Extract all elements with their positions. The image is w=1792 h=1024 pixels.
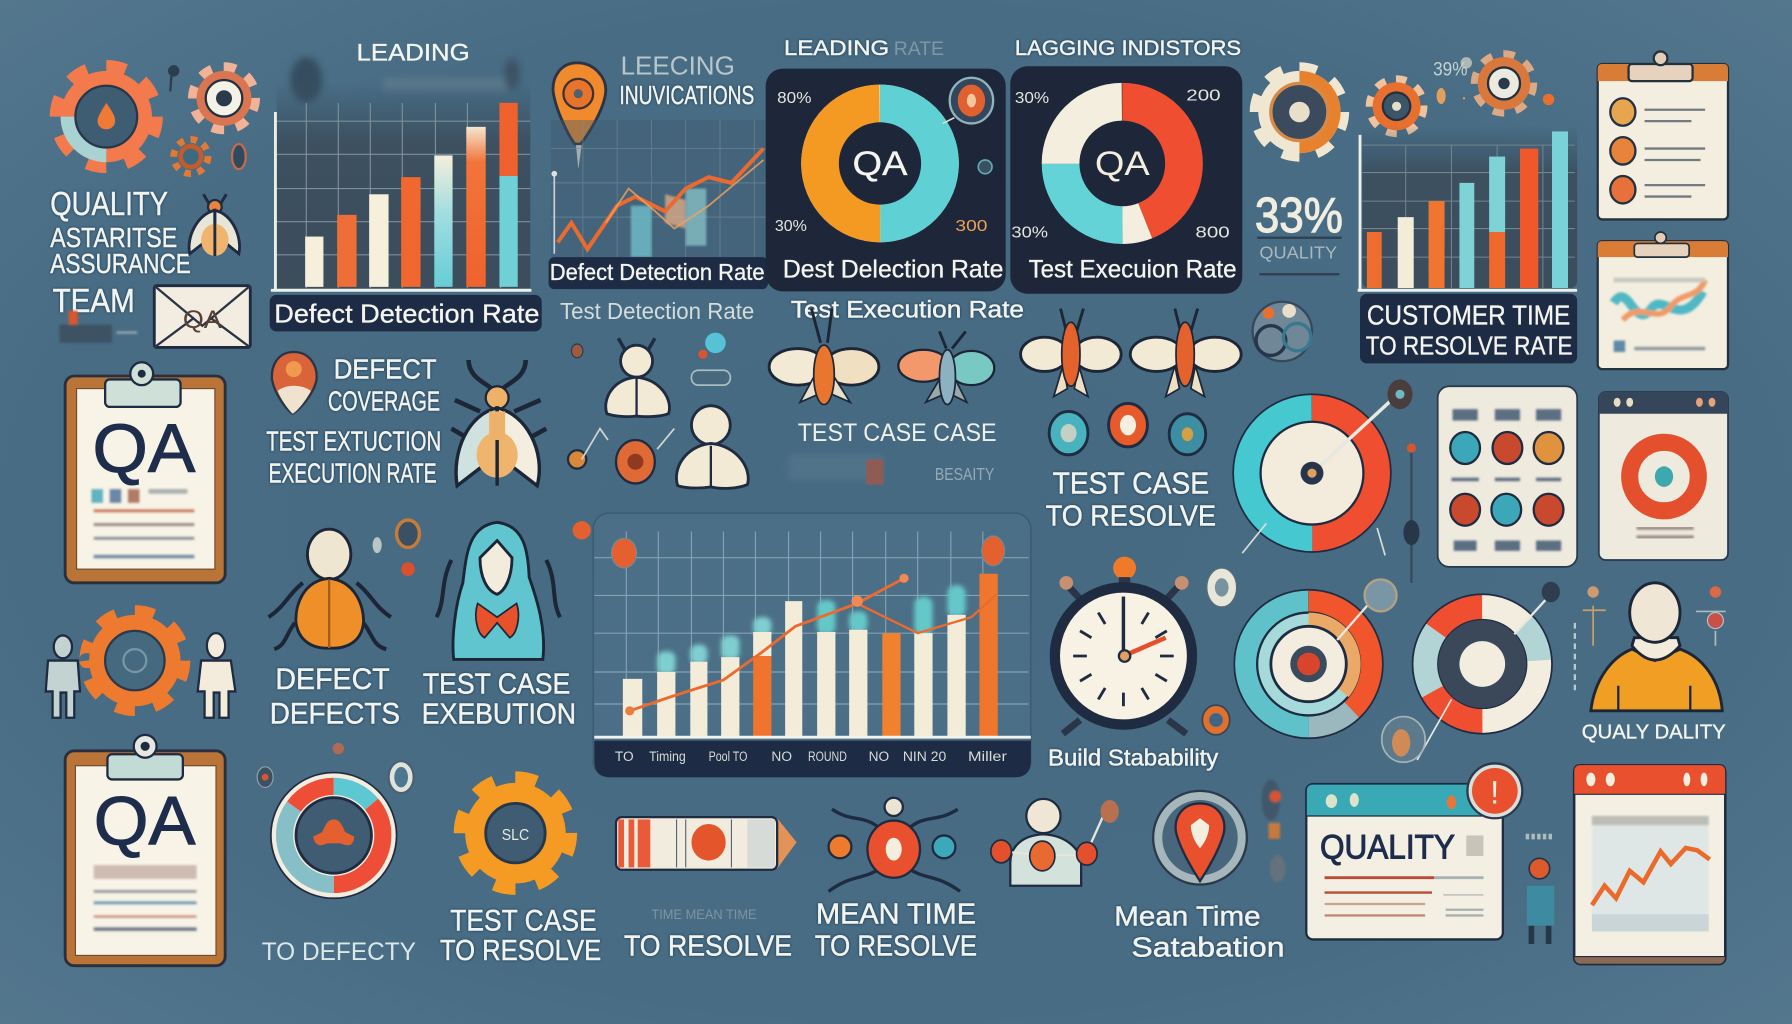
chart label: TO RESOLVE RATE <box>1366 330 1573 360</box>
chart footer <box>594 741 1031 777</box>
axis labels: NO <box>771 749 792 764</box>
heading: quality: QUALITY <box>1320 828 1455 866</box>
chart background <box>593 513 1031 777</box>
axis labels: Pool TO <box>709 749 747 764</box>
text: defect defects: DEFECTS <box>270 697 400 730</box>
panel background <box>1010 66 1242 294</box>
panel: lagging icons row <box>1253 55 1554 361</box>
chart label <box>1360 294 1577 363</box>
panel: target window <box>1599 392 1728 560</box>
axis labels: ROUND <box>808 749 847 764</box>
heading: leading rate: LEADING <box>784 35 889 60</box>
icon: tiny nodes <box>373 520 419 576</box>
text: test case execution: TEST CASE <box>423 669 570 701</box>
panel: stopwatch <box>1048 557 1237 771</box>
panel background <box>766 69 1006 291</box>
icon: orange gear <box>1370 80 1423 133</box>
QA mark: QA <box>93 410 196 487</box>
panel: main trend chart <box>593 513 1031 777</box>
ring chart <box>271 773 397 898</box>
panel: to defect ring <box>257 743 416 966</box>
stat: 33% quality <box>1255 189 1343 274</box>
gear label: SLC <box>502 827 529 844</box>
panel: fly icons <box>769 309 1241 405</box>
card clip <box>1634 232 1689 257</box>
caption: test execution rate: Test Execution Rate <box>791 297 1024 324</box>
heading: leeching inuvications <box>619 50 754 110</box>
text: mean time satabation: Satabation <box>1131 932 1285 963</box>
chart plot <box>551 120 768 257</box>
target one <box>1234 590 1383 738</box>
heading: quality assurance team: TEAM <box>53 283 135 320</box>
target two pointer <box>1382 582 1560 762</box>
axis labels: Miller <box>968 749 1007 764</box>
text: mean time to resolve: MEAN TIME <box>816 898 976 930</box>
icon: red marker <box>573 521 591 539</box>
stat: 33% quality: QUALITY <box>1259 242 1338 262</box>
target ring <box>1630 442 1698 511</box>
axis labels: NIN 20 <box>903 749 947 764</box>
chart plot area <box>1362 126 1577 288</box>
card body <box>1438 386 1577 567</box>
window dots <box>1586 773 1707 786</box>
icon: small label clutter <box>59 311 137 343</box>
icon: stopwatch <box>1055 557 1192 734</box>
icon: red fly left <box>1021 309 1121 397</box>
heading: quality assurance team <box>50 186 191 320</box>
text: mean time satabation: Mean Time <box>1114 901 1261 932</box>
icon: cream gear <box>1257 70 1342 154</box>
icon: red fly right <box>1130 309 1241 397</box>
text: defect defects <box>270 663 400 730</box>
chart bar caps <box>657 585 966 674</box>
text: mean time satabation <box>1114 901 1285 963</box>
window dots <box>1614 398 1715 407</box>
gauge dial <box>1233 394 1391 552</box>
icon: ringed pin <box>1153 791 1247 885</box>
small percent label: 39% <box>1433 58 1467 80</box>
panel: target charts <box>1234 579 1560 762</box>
stopwatch hands <box>1119 597 1166 662</box>
chart label: Defect Detection Rate <box>550 259 765 285</box>
text: defect coverage and test execution: COVERAGE <box>328 385 440 416</box>
stat: 33% quality: 33% <box>1255 189 1343 243</box>
icon: small badges <box>257 743 414 793</box>
icon: nodes <box>991 800 1119 871</box>
blurred chart <box>1614 280 1705 352</box>
clipboard detail lines <box>94 865 197 929</box>
donut values: 800 <box>1195 225 1230 242</box>
text: test case to resolve: TO RESOLVE <box>1046 501 1216 533</box>
icon: bug figure one <box>606 338 669 417</box>
donut values: 30% <box>1011 225 1048 242</box>
gauge side pins <box>1242 443 1419 583</box>
panel: team gear with people <box>46 613 235 718</box>
panel: test case to resolve gear <box>440 779 601 967</box>
alert badge: ! <box>1490 774 1499 810</box>
text: test case execution: EXEBUTION <box>422 698 576 730</box>
heading: quality assurance team: ASTARITSE <box>50 222 177 253</box>
window body <box>1306 784 1503 939</box>
panel: QA clipboard lower <box>65 735 225 966</box>
chart baseline <box>594 736 1031 738</box>
icon: small gear <box>193 67 255 129</box>
icon: tiny markers <box>168 65 246 169</box>
caption: to resolve: TO RESOLVE <box>624 930 792 962</box>
icon: tiny gear <box>174 139 208 174</box>
donut values: 80% <box>777 90 811 107</box>
text: mean time to resolve: TO RESOLVE <box>815 930 977 962</box>
card header <box>1598 241 1728 257</box>
panel: status buttons card <box>1438 386 1577 567</box>
faded caption: TIME MEAN TIME <box>651 907 757 922</box>
checklist items <box>1610 98 1705 203</box>
chart axes <box>271 112 531 290</box>
donut caption: Dest Delection Rate <box>783 256 1003 284</box>
window base <box>1574 766 1726 965</box>
donut label: QA <box>1095 145 1150 183</box>
icon: node bug <box>829 798 960 891</box>
icon: gear <box>462 779 569 887</box>
icon: small nodes <box>568 344 674 483</box>
text: defect defects: DEFECT <box>275 663 390 696</box>
icon: large beetle <box>451 360 546 486</box>
icon: envelope with QA mark: QA <box>183 306 222 334</box>
button labels <box>1451 409 1561 551</box>
window header <box>1599 392 1728 414</box>
icon: person body <box>1010 799 1081 886</box>
panel: lagging donut <box>1010 35 1242 294</box>
caption: test detection rate: Test Detection Rate <box>560 298 754 324</box>
panel: defect coverage <box>266 352 546 488</box>
donut label: QA <box>853 145 908 183</box>
window header <box>1306 784 1503 816</box>
gauge needle <box>1301 379 1413 485</box>
panel: quality window <box>1306 763 1522 939</box>
chart plot area <box>277 82 530 288</box>
chart grid <box>277 103 530 288</box>
icon: beetle <box>189 194 240 256</box>
gauge <box>1233 379 1419 583</box>
icon: map pin <box>553 63 606 169</box>
panel: mean time to resolve <box>815 798 977 962</box>
icon: pins beside person <box>1575 586 1726 691</box>
heading: lagging indicators: LAGGING INDISTORS <box>1015 35 1241 60</box>
panel: defect figure <box>269 520 419 730</box>
clipboard paper <box>77 389 215 569</box>
donut values: 300 <box>955 218 988 235</box>
text: test case to resolve <box>1046 466 1216 533</box>
clipboard frame <box>65 376 225 583</box>
icon: teal fly <box>898 331 994 405</box>
text: test case case: TEST CASE CASE <box>798 419 997 447</box>
blurred chart caption <box>290 57 520 103</box>
icon: large gear <box>57 67 155 166</box>
trend line <box>625 574 997 715</box>
clipboard body <box>1598 64 1728 219</box>
icon: defect pin <box>272 352 317 414</box>
icon: bug figure two <box>676 406 748 488</box>
chart label: Defect Detection Rate <box>274 298 539 328</box>
axis labels <box>615 749 1007 764</box>
icon: donut callout <box>943 78 993 174</box>
text: test case execution <box>422 669 576 730</box>
icon: person left <box>46 635 80 718</box>
target one pointer <box>1337 579 1397 640</box>
chart grid <box>1362 145 1575 288</box>
text: defect coverage and test execution: TEST EXTUCTION <box>266 425 441 456</box>
chart bars <box>305 103 518 287</box>
text: defect coverage and test execution <box>266 353 441 488</box>
text: test case to resolve: TEST CASE <box>1053 466 1209 501</box>
clipboard detail lines <box>91 489 194 557</box>
axis labels: Timing <box>649 749 686 764</box>
axis labels: TO <box>615 749 634 764</box>
text: defect coverage and test execution: EXECUTION RATE <box>269 457 437 488</box>
icon: person right <box>198 633 235 718</box>
text: defect coverage and test execution: DEFECT <box>334 353 437 384</box>
window text lines <box>1637 528 1694 537</box>
panel: quality person <box>1575 583 1726 743</box>
heading: leading: LEADING <box>357 40 470 67</box>
clipboard clip <box>107 735 183 779</box>
icon: capsule <box>616 817 797 870</box>
donut chart <box>1061 102 1184 225</box>
donut values: 200 <box>1186 88 1221 105</box>
panel: QA clipboard upper <box>65 362 225 583</box>
panel: person with nodes <box>991 799 1119 886</box>
chart label: CUSTOMER TIME <box>1367 300 1570 331</box>
icon: small badges <box>1202 568 1237 735</box>
chart bars <box>1367 131 1568 288</box>
target two <box>1413 594 1552 734</box>
panel: top right chart card <box>1598 232 1728 369</box>
clipboard frame <box>65 751 225 966</box>
window body <box>1599 392 1728 560</box>
icon: hooded figure <box>437 522 560 659</box>
icon: envelope with QA mark <box>154 286 250 347</box>
icon: bicycle badge <box>1253 302 1312 361</box>
donut values <box>1011 88 1230 242</box>
text: mean time to resolve <box>815 898 977 962</box>
panel: red trend window <box>1574 765 1726 965</box>
icon: three status circles <box>1049 403 1206 455</box>
axis labels: NO <box>869 749 889 764</box>
icon: person <box>1591 583 1722 711</box>
panel: test case to resolve <box>1046 403 1216 533</box>
caption: build stabability: Build Stabability <box>1048 745 1219 771</box>
caption: qualy dality: QUALY DALITY <box>1582 720 1726 743</box>
donut chart <box>801 85 959 242</box>
icon: orange bug figure <box>269 529 391 649</box>
chart bars <box>623 574 998 737</box>
QA mark: QA <box>94 783 196 860</box>
heading: leeching inuvications: INUVICATIONS <box>619 80 754 110</box>
clipboard clip <box>105 362 181 407</box>
panel: customer time to resolve bar chart <box>1358 126 1577 363</box>
icon: small standing figure <box>1526 837 1554 944</box>
alert badge <box>1467 763 1522 818</box>
text: test case to resolve: TO RESOLVE <box>440 935 601 967</box>
panel: team header <box>50 65 255 347</box>
icon: pills <box>691 333 730 385</box>
heading: quality assurance team: QUALITY <box>50 186 168 223</box>
icon: orange gear <box>87 613 183 709</box>
clipboard header <box>1598 64 1728 81</box>
clipboard paper <box>75 766 216 955</box>
window body <box>1575 793 1725 957</box>
text: test case to resolve <box>440 904 601 967</box>
panel: leading donut <box>766 35 1006 291</box>
panel: bug figures <box>568 333 748 488</box>
chart markers <box>611 536 1005 568</box>
mini chart <box>1592 816 1710 931</box>
panel: bar chart, defect detection rate <box>270 40 542 331</box>
donut values <box>775 90 988 235</box>
icon: orange fly <box>769 309 879 405</box>
panel: line chart, leading indications <box>549 50 768 324</box>
panel: pin badge <box>1114 779 1286 963</box>
faded caption: beauty <box>789 455 995 485</box>
heading: quality assurance team: ASSURANCE <box>50 248 191 279</box>
chart grid <box>594 531 1029 737</box>
window lines <box>1325 835 1483 915</box>
donut values: 30% <box>775 218 807 235</box>
donut values: 30% <box>1015 90 1049 107</box>
chart axes <box>1358 135 1577 290</box>
window dots <box>1326 793 1456 809</box>
icon: small bug in ring <box>313 819 354 845</box>
card body <box>1598 241 1728 369</box>
heading: leeching inuvications: LEECING <box>621 50 735 80</box>
faded caption: beauty: BESAITY <box>935 464 995 484</box>
icon: tiny pins <box>1437 57 1554 105</box>
text: test case to resolve: TEST CASE <box>450 904 597 937</box>
panel: top right clipboard <box>1598 51 1728 219</box>
clipboard clip <box>1629 51 1693 81</box>
button grid <box>1450 432 1563 526</box>
icon: side clutter <box>1262 779 1286 882</box>
faded heading suffix: RATE <box>894 38 944 60</box>
window header <box>1574 765 1726 794</box>
panel: capsule timeline <box>616 817 797 962</box>
icon: rust gear <box>1475 55 1533 112</box>
panel: test case execution figure <box>422 521 591 730</box>
donut caption: Test Execuion Rate <box>1029 256 1237 284</box>
caption: to defecty: TO DEFECTY <box>262 938 416 966</box>
